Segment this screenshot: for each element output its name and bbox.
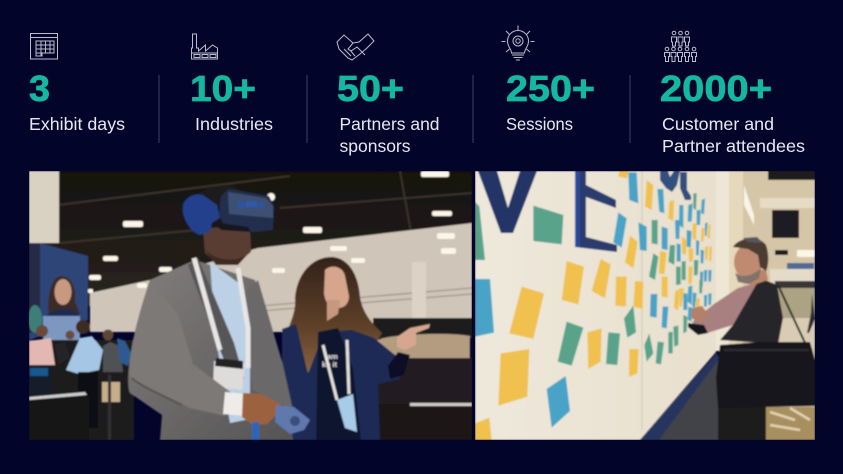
icon: factory <box>192 34 218 59</box>
year lettering at top of wall <box>660 171 691 200</box>
divider lines <box>159 75 630 143</box>
VR headset <box>219 189 274 232</box>
woman presenter <box>282 257 430 440</box>
shirt and arm <box>690 282 763 334</box>
icon: light bulb <box>502 26 534 60</box>
hair <box>201 185 242 204</box>
stat: sessions <box>502 26 595 134</box>
hair <box>288 257 382 373</box>
photo: sticky-note wall <box>475 171 815 440</box>
floor and baseboard <box>659 360 719 440</box>
vest <box>720 278 783 344</box>
woman presenter: am <box>327 352 338 361</box>
background crowd <box>29 320 134 440</box>
face <box>734 245 762 279</box>
letter V <box>478 171 537 233</box>
label: customer and partner attendees: Partner attendees <box>662 136 805 156</box>
carpet <box>765 407 815 440</box>
icon: handshake <box>337 34 374 60</box>
stat: partners and sponsors <box>337 34 440 156</box>
trousers <box>718 405 766 440</box>
number: 10+: 10+ <box>190 68 256 109</box>
hallway beyond wall <box>742 171 815 408</box>
label: partners and sponsors: Partners and <box>340 114 440 134</box>
neck <box>748 270 768 286</box>
icon: group of people <box>664 31 696 62</box>
lanyards <box>194 258 248 368</box>
face <box>324 267 349 308</box>
hall back wall <box>90 223 472 332</box>
label: sessions: Sessions <box>506 114 573 134</box>
pale column <box>714 171 730 352</box>
ceiling lights <box>88 171 456 293</box>
stat: exhibit days <box>29 34 125 134</box>
hair <box>733 238 768 271</box>
neck and face <box>203 228 251 263</box>
bag <box>716 342 815 408</box>
number: 3: 3 <box>29 68 50 109</box>
lapel <box>188 258 244 390</box>
badge <box>213 361 245 390</box>
hand <box>242 393 281 425</box>
pointing hand <box>397 324 430 350</box>
woman presenter: ke it <box>322 360 338 369</box>
sticky notes <box>475 171 668 440</box>
jacket <box>282 324 406 440</box>
letter E <box>575 171 617 252</box>
man with shoulder bag <box>688 237 815 440</box>
label: exhibit days: Exhibit days <box>29 114 125 134</box>
black curtain and display table <box>375 358 472 404</box>
stat: industries <box>190 34 273 134</box>
shoulder strap <box>778 285 806 345</box>
shirt cuff <box>223 392 247 416</box>
lanyard and badge <box>323 340 349 400</box>
number: 2000+: 2000+ <box>660 68 772 109</box>
number: 250+: 250+ <box>506 68 595 109</box>
label: industries: Industries <box>195 114 273 134</box>
icon: calendar <box>30 34 58 59</box>
shirt <box>210 262 250 423</box>
suit <box>128 260 293 440</box>
pillar <box>29 171 59 243</box>
stat: customer and partner attendees <box>660 31 805 156</box>
sleeve <box>131 322 231 416</box>
label: customer and partner attendees: Customer and <box>662 114 774 134</box>
VR controller <box>275 405 310 434</box>
t-shirt <box>316 328 361 440</box>
photo: VR demo at the exhibit hall <box>28 171 472 440</box>
man in VR headset <box>128 185 310 440</box>
booth banner <box>29 243 88 340</box>
hand at wall <box>691 306 708 322</box>
table in foreground left <box>39 396 89 428</box>
label: partners and sponsors: sponsors <box>340 136 411 156</box>
hall ceiling <box>29 171 472 306</box>
wall <box>475 171 716 440</box>
number: 50+: 50+ <box>337 68 404 109</box>
